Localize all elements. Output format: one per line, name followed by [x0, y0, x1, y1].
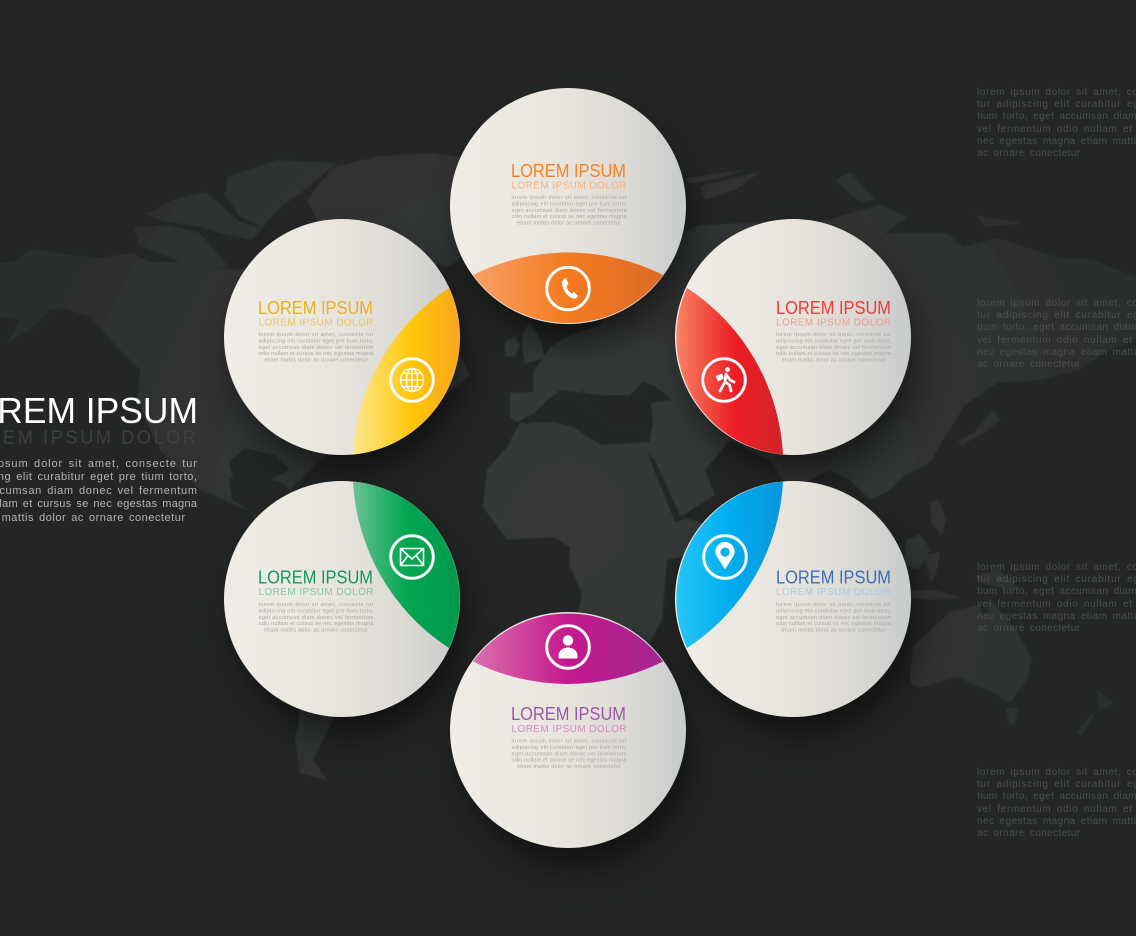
orange band: [473, 253, 663, 323]
red band: [676, 288, 783, 454]
purple body text: eget accumsan diam donec vel fermentum: [512, 752, 627, 758]
icon: location pin: [704, 536, 746, 578]
red body text: [776, 332, 892, 364]
blue body text: [776, 602, 892, 634]
panel: orange circle: [450, 88, 686, 324]
red body text: eget accumsan diam donec vel fermentum: [776, 345, 891, 351]
purple subtitle: LOREM IPSUM DOLOR: [512, 724, 626, 735]
red heading: LOREM IPSUM: [776, 298, 891, 318]
green band: [353, 482, 460, 648]
red body text: odio nullam et cursus se nec egestas magna: [776, 351, 892, 357]
orange heading: LOREM IPSUM: [511, 161, 626, 181]
blue subtitle: LOREM IPSUM DOLOR: [776, 587, 891, 598]
icon: envelope: [391, 536, 433, 578]
orange body text: eget accumsan diam donec vel fermentum: [512, 208, 627, 214]
yellow body text: eget accumsan diam donec vel fermentum: [258, 345, 374, 351]
panel: purple circle: [450, 612, 686, 848]
right text block 1: ac ornare conectetur: [977, 148, 1081, 159]
yellow subtitle: LOREM IPSUM DOLOR: [258, 318, 374, 328]
icon: globe: [391, 359, 433, 401]
panel: yellow circle: [224, 219, 460, 455]
yellow body text: etiam mattis dolor ac ornare conectetur: [264, 358, 368, 364]
purple body text: etiam mattis dolor ac ornare conectetur: [517, 764, 621, 770]
icon: walking person: [703, 359, 745, 401]
right text block 3: ac ornare conectetur: [977, 623, 1081, 634]
world map: [0, 153, 1136, 780]
panel: green circle: [224, 481, 460, 717]
orange body text: adipiscing elit curabitur eget pre tium torto,: [512, 202, 627, 208]
panel: blue circle: [675, 481, 911, 717]
icon: user: [547, 626, 589, 668]
blue body text: odio nullam et cursus se nec egestas magna: [776, 621, 892, 627]
green body text: eget accumsan diam donec vel fermentum: [258, 615, 374, 621]
yellow body text: odio nullam et cursus se nec egestas magna: [258, 351, 374, 357]
blue band: [676, 482, 783, 648]
purple body text: adipiscing elit curabitur eget pre tium torto,: [512, 745, 627, 751]
blue body text: adipiscing elit curabitur eget pre tium torto,: [776, 608, 891, 614]
yellow body text: lorem ipsum dolor sit amet, consecte tur: [258, 332, 374, 338]
panel: red circle: [675, 219, 911, 455]
right text block 4: ac ornare conectetur: [977, 828, 1081, 839]
yellow heading: LOREM IPSUM: [258, 298, 373, 318]
green subtitle: LOREM IPSUM DOLOR: [258, 587, 374, 598]
left heading and intro text: [0, 390, 198, 524]
right text block 4: [977, 767, 1136, 839]
green body text: [258, 602, 374, 634]
orange body text: lorem ipsum dolor sit amet, consecte tur: [512, 195, 627, 201]
green body text: odio nullam et cursus se nec egestas magna: [258, 621, 374, 627]
purple body text: lorem ipsum dolor sit amet, consecte tur: [512, 738, 627, 744]
right text block 3: [977, 562, 1136, 634]
green body text: etiam mattis dolor ac ornare conectetur: [264, 628, 368, 634]
blue body text: eget accumsan diam donec vel fermentum: [776, 615, 891, 621]
circle shadows: [238, 116, 913, 864]
right text block 1: [977, 87, 1136, 159]
purple heading: LOREM IPSUM: [511, 704, 626, 724]
green body text: lorem ipsum dolor sit amet, consecte tur: [258, 602, 374, 608]
red body text: etiam mattis dolor ac ornare conectetur: [782, 358, 886, 364]
orange body text: etiam mattis dolor ac ornare conectetur: [517, 220, 621, 226]
right text block 2: [977, 298, 1136, 370]
green heading: LOREM IPSUM: [258, 568, 373, 588]
blue heading: LOREM IPSUM: [776, 568, 891, 588]
red subtitle: LOREM IPSUM DOLOR: [776, 318, 891, 328]
purple band: [473, 613, 663, 684]
orange body text: odio nullam et cursus se nec egestas magna: [512, 214, 627, 220]
purple body text: odio nullam et cursus se nec egestas magna: [512, 758, 627, 764]
yellow band: [353, 288, 460, 454]
left body text: [0, 458, 198, 524]
purple body text: [512, 738, 627, 770]
orange subtitle: LOREM IPSUM DOLOR: [512, 180, 626, 192]
blue body text: etiam mattis dolor ac ornare conectetur: [782, 628, 886, 634]
orange body text: [512, 195, 627, 226]
yellow body text: [258, 332, 374, 364]
red body text: lorem ipsum dolor sit amet, consecte tur: [776, 332, 891, 338]
right text block 2: ac ornare conectetur: [977, 359, 1081, 370]
red body text: adipiscing elit curabitur eget pre tium torto,: [776, 338, 891, 344]
icon: phone: [547, 267, 589, 310]
yellow body text: adipiscing elit curabitur eget pre tium torto,: [258, 338, 374, 344]
green body text: adipiscing elit curabitur eget pre tium torto,: [258, 608, 374, 614]
blue body text: lorem ipsum dolor sit amet, consecte tur: [776, 602, 891, 608]
